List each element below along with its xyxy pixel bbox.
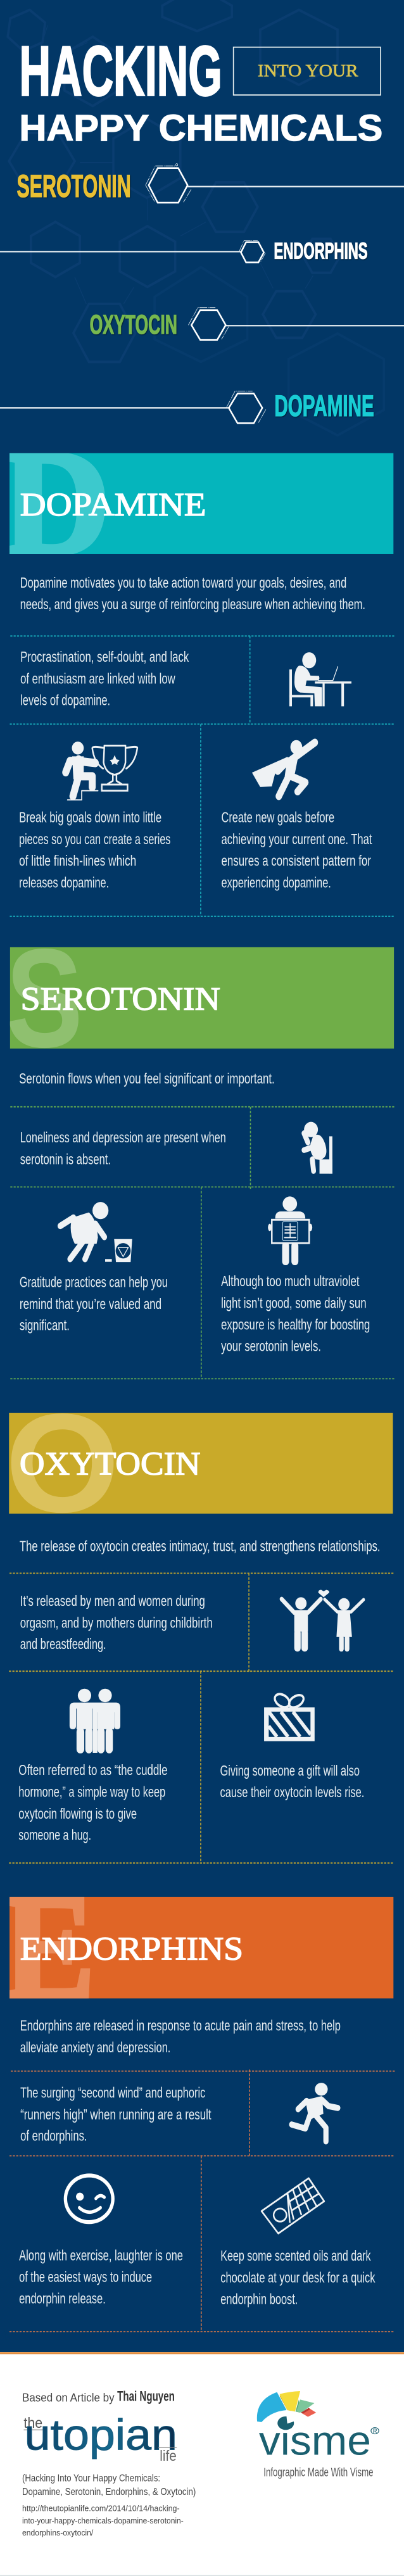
banner: serotonin: S bbox=[6, 920, 83, 1077]
text: released by bbox=[20, 1593, 213, 1653]
label: oxytocin: OXYTOCIN bbox=[90, 309, 177, 339]
text: article url: http://theutopianlife.com/2014/10/14/hacking- bbox=[22, 2504, 180, 2513]
text: procrastination bbox=[20, 650, 189, 709]
box: into your: INTO YOUR bbox=[258, 61, 358, 80]
text: second wind: The surging “second wind” and euphoric bbox=[20, 2085, 205, 2101]
text: gratitude: remind that you’re valued and bbox=[20, 1296, 161, 1312]
title: hacking: HACKING bbox=[20, 31, 222, 110]
text: laughter: endorphin release. bbox=[19, 2291, 106, 2307]
text: scented oils: chocolate at your desk for a quick bbox=[220, 2270, 376, 2286]
banner: dopamine bbox=[9, 453, 394, 554]
text: ultraviolet: Although too much ultraviolet bbox=[221, 1273, 360, 1289]
panel: oxytocin bbox=[5, 1385, 394, 1863]
text: second wind: of endorphins. bbox=[20, 2128, 87, 2144]
text: laughter bbox=[19, 2248, 183, 2307]
icon: couple with heart bbox=[282, 1590, 363, 1651]
text: cuddle hormone: Often referred to as “the cuddle bbox=[18, 1762, 167, 1778]
icon: winking smiley bbox=[65, 2175, 113, 2222]
banner: oxytocin bbox=[9, 1413, 393, 1513]
text: serotonin intro: Serotonin flows when you feel significant or important. bbox=[19, 1071, 275, 1087]
banner: serotonin: SEROTONIN bbox=[21, 981, 220, 1018]
title: happy chemicals: HAPPY CHEMICALS bbox=[20, 107, 382, 148]
text: cuddle hormone: oxytocin flowing is to give bbox=[18, 1806, 137, 1822]
text: dopamine intro bbox=[20, 575, 365, 613]
text: create new goals: Create new goals before bbox=[222, 810, 334, 826]
panel: serotonin bbox=[6, 920, 395, 1379]
text: ultraviolet: light isn’t good, some daily sun bbox=[221, 1296, 367, 1311]
logo: visme: visme bbox=[259, 2418, 371, 2464]
banner: serotonin bbox=[10, 947, 394, 1049]
text: article url: endorphins-oxytocin/ bbox=[22, 2529, 94, 2538]
icon: superhero bbox=[252, 740, 315, 796]
text: giving a gift: Giving someone a gift will also bbox=[220, 1763, 360, 1779]
text: article title bbox=[22, 2473, 196, 2497]
text: procrastination: Procrastination, self-doubt, and lack bbox=[20, 650, 189, 666]
text: procrastination: levels of dopamine. bbox=[20, 693, 110, 709]
text: break big goals: pieces so you can create a series bbox=[19, 832, 170, 847]
text: giving a gift: cause their oxytocin levels rise. bbox=[220, 1784, 364, 1800]
text: cuddle hormone: hormone,” a simple way to keep bbox=[18, 1784, 165, 1800]
text: endorphins intro: alleviate anxiety and depression. bbox=[20, 2040, 170, 2056]
text: article title: (Hacking Into Your Happy Chemicals: bbox=[22, 2473, 160, 2484]
text: loneliness: serotonin is absent. bbox=[20, 1152, 111, 1168]
icon: person at desk bbox=[289, 652, 351, 706]
text: scented oils: Keep some scented oils and dark bbox=[220, 2249, 371, 2264]
icon: x-ray person bbox=[268, 1196, 312, 1265]
logo: the utopian life: life bbox=[160, 2447, 177, 2464]
text: break big goals bbox=[19, 810, 170, 891]
text: giving a gift bbox=[220, 1763, 364, 1800]
banner: endorphins: ENDORPHINS bbox=[20, 1931, 243, 1967]
label: serotonin: SEROTONIN bbox=[16, 169, 131, 205]
panel: header bbox=[0, 0, 404, 436]
text: article credit bbox=[22, 2389, 175, 2404]
logo: the utopian life: utopian bbox=[25, 2411, 177, 2459]
text: laughter: of the easiest ways to induce bbox=[19, 2270, 152, 2285]
text: second wind: “runners high” when running are a result bbox=[20, 2107, 211, 2123]
text: dopamine intro: Dopamine motivates you to take action toward your goals, desires, and bbox=[20, 575, 346, 591]
text: article credit: Thai Nguyen bbox=[117, 2389, 175, 2404]
text: endorphins intro bbox=[20, 2018, 341, 2056]
text: cuddle hormone: someone a hug. bbox=[18, 1828, 91, 1843]
banner: dopamine: DOPAMINE bbox=[20, 486, 206, 523]
text: create new goals: ensures a consistent pattern for bbox=[222, 853, 371, 869]
text: break big goals: Break big goals down into little bbox=[19, 810, 161, 826]
banner: oxytocin: OXYTOCIN bbox=[20, 1446, 201, 1482]
label: dopamine bbox=[0, 389, 374, 423]
text: gratitude bbox=[20, 1275, 168, 1334]
banner: dopamine: D bbox=[1, 419, 111, 588]
text: laughter: Along with exercise, laughter is one bbox=[19, 2248, 183, 2264]
logo: the utopian life: the bbox=[23, 2414, 42, 2431]
label: endorphins bbox=[0, 239, 368, 264]
text: procrastination: of enthusiasm are linked with low bbox=[20, 671, 175, 687]
banner: oxytocin: O bbox=[5, 1385, 120, 1542]
text: loneliness: Loneliness and depression are present when bbox=[20, 1130, 226, 1146]
text: ultraviolet: your serotonin levels. bbox=[221, 1339, 321, 1354]
logo: visme: R bbox=[373, 2428, 377, 2435]
text: cuddle hormone bbox=[18, 1762, 167, 1843]
panel: endorphins bbox=[3, 1862, 395, 2332]
text: gratitude: Gratitude practices can help you bbox=[20, 1275, 168, 1291]
text: scented oils: endorphin boost. bbox=[220, 2292, 298, 2308]
box: into your bbox=[234, 47, 381, 95]
text: loneliness bbox=[20, 1130, 226, 1168]
text: scented oils bbox=[220, 2249, 376, 2308]
icon: sad seated person bbox=[304, 1122, 332, 1174]
logo: visme bbox=[257, 2391, 379, 2464]
text: article url: into-your-happy-chemicals-dopamine-serotonin- bbox=[22, 2516, 184, 2526]
icon: hugging pair bbox=[70, 1689, 120, 1753]
label: oxytocin bbox=[90, 308, 404, 340]
text: released by: and breastfeeding. bbox=[20, 1637, 106, 1653]
icon: picking up litter bbox=[60, 1202, 132, 1262]
text: article credit: Based on Article by bbox=[22, 2391, 115, 2404]
text: ultraviolet: exposure is healthy for boosting bbox=[221, 1317, 370, 1333]
icon: chocolate bar bbox=[262, 2178, 324, 2233]
text: create new goals: experiencing dopamine. bbox=[222, 875, 331, 891]
panel: dopamine bbox=[1, 419, 395, 916]
text: create new goals bbox=[222, 810, 372, 891]
panel: footer bbox=[0, 2352, 404, 2576]
banner: endorphins: E bbox=[3, 1862, 96, 2032]
banner: endorphins bbox=[9, 1897, 394, 1998]
text: second wind bbox=[20, 2085, 211, 2144]
icon: climbing to trophy bbox=[66, 742, 137, 800]
text: released by: orgasm, and by mothers during childbirth bbox=[20, 1615, 213, 1631]
text: article title: Dopamine, Serotonin, Endorphins, & Oxytocin) bbox=[22, 2487, 196, 2497]
icon: gift bbox=[264, 1691, 315, 1741]
label: serotonin bbox=[16, 163, 404, 205]
text: released by: It’s released by men and women during bbox=[20, 1593, 205, 1609]
text: break big goals: of little finish-lines which bbox=[19, 853, 136, 869]
text: ultraviolet bbox=[221, 1273, 370, 1354]
text: create new goals: achieving your current one. That bbox=[222, 832, 372, 847]
text: break big goals: releases dopamine. bbox=[19, 875, 109, 891]
text: gratitude: significant. bbox=[20, 1318, 70, 1334]
text: endorphins intro: Endorphins are released in response to acute pain and stress, to help bbox=[20, 2018, 341, 2034]
icon: runner bbox=[292, 2083, 338, 2142]
text: article url bbox=[22, 2504, 184, 2538]
